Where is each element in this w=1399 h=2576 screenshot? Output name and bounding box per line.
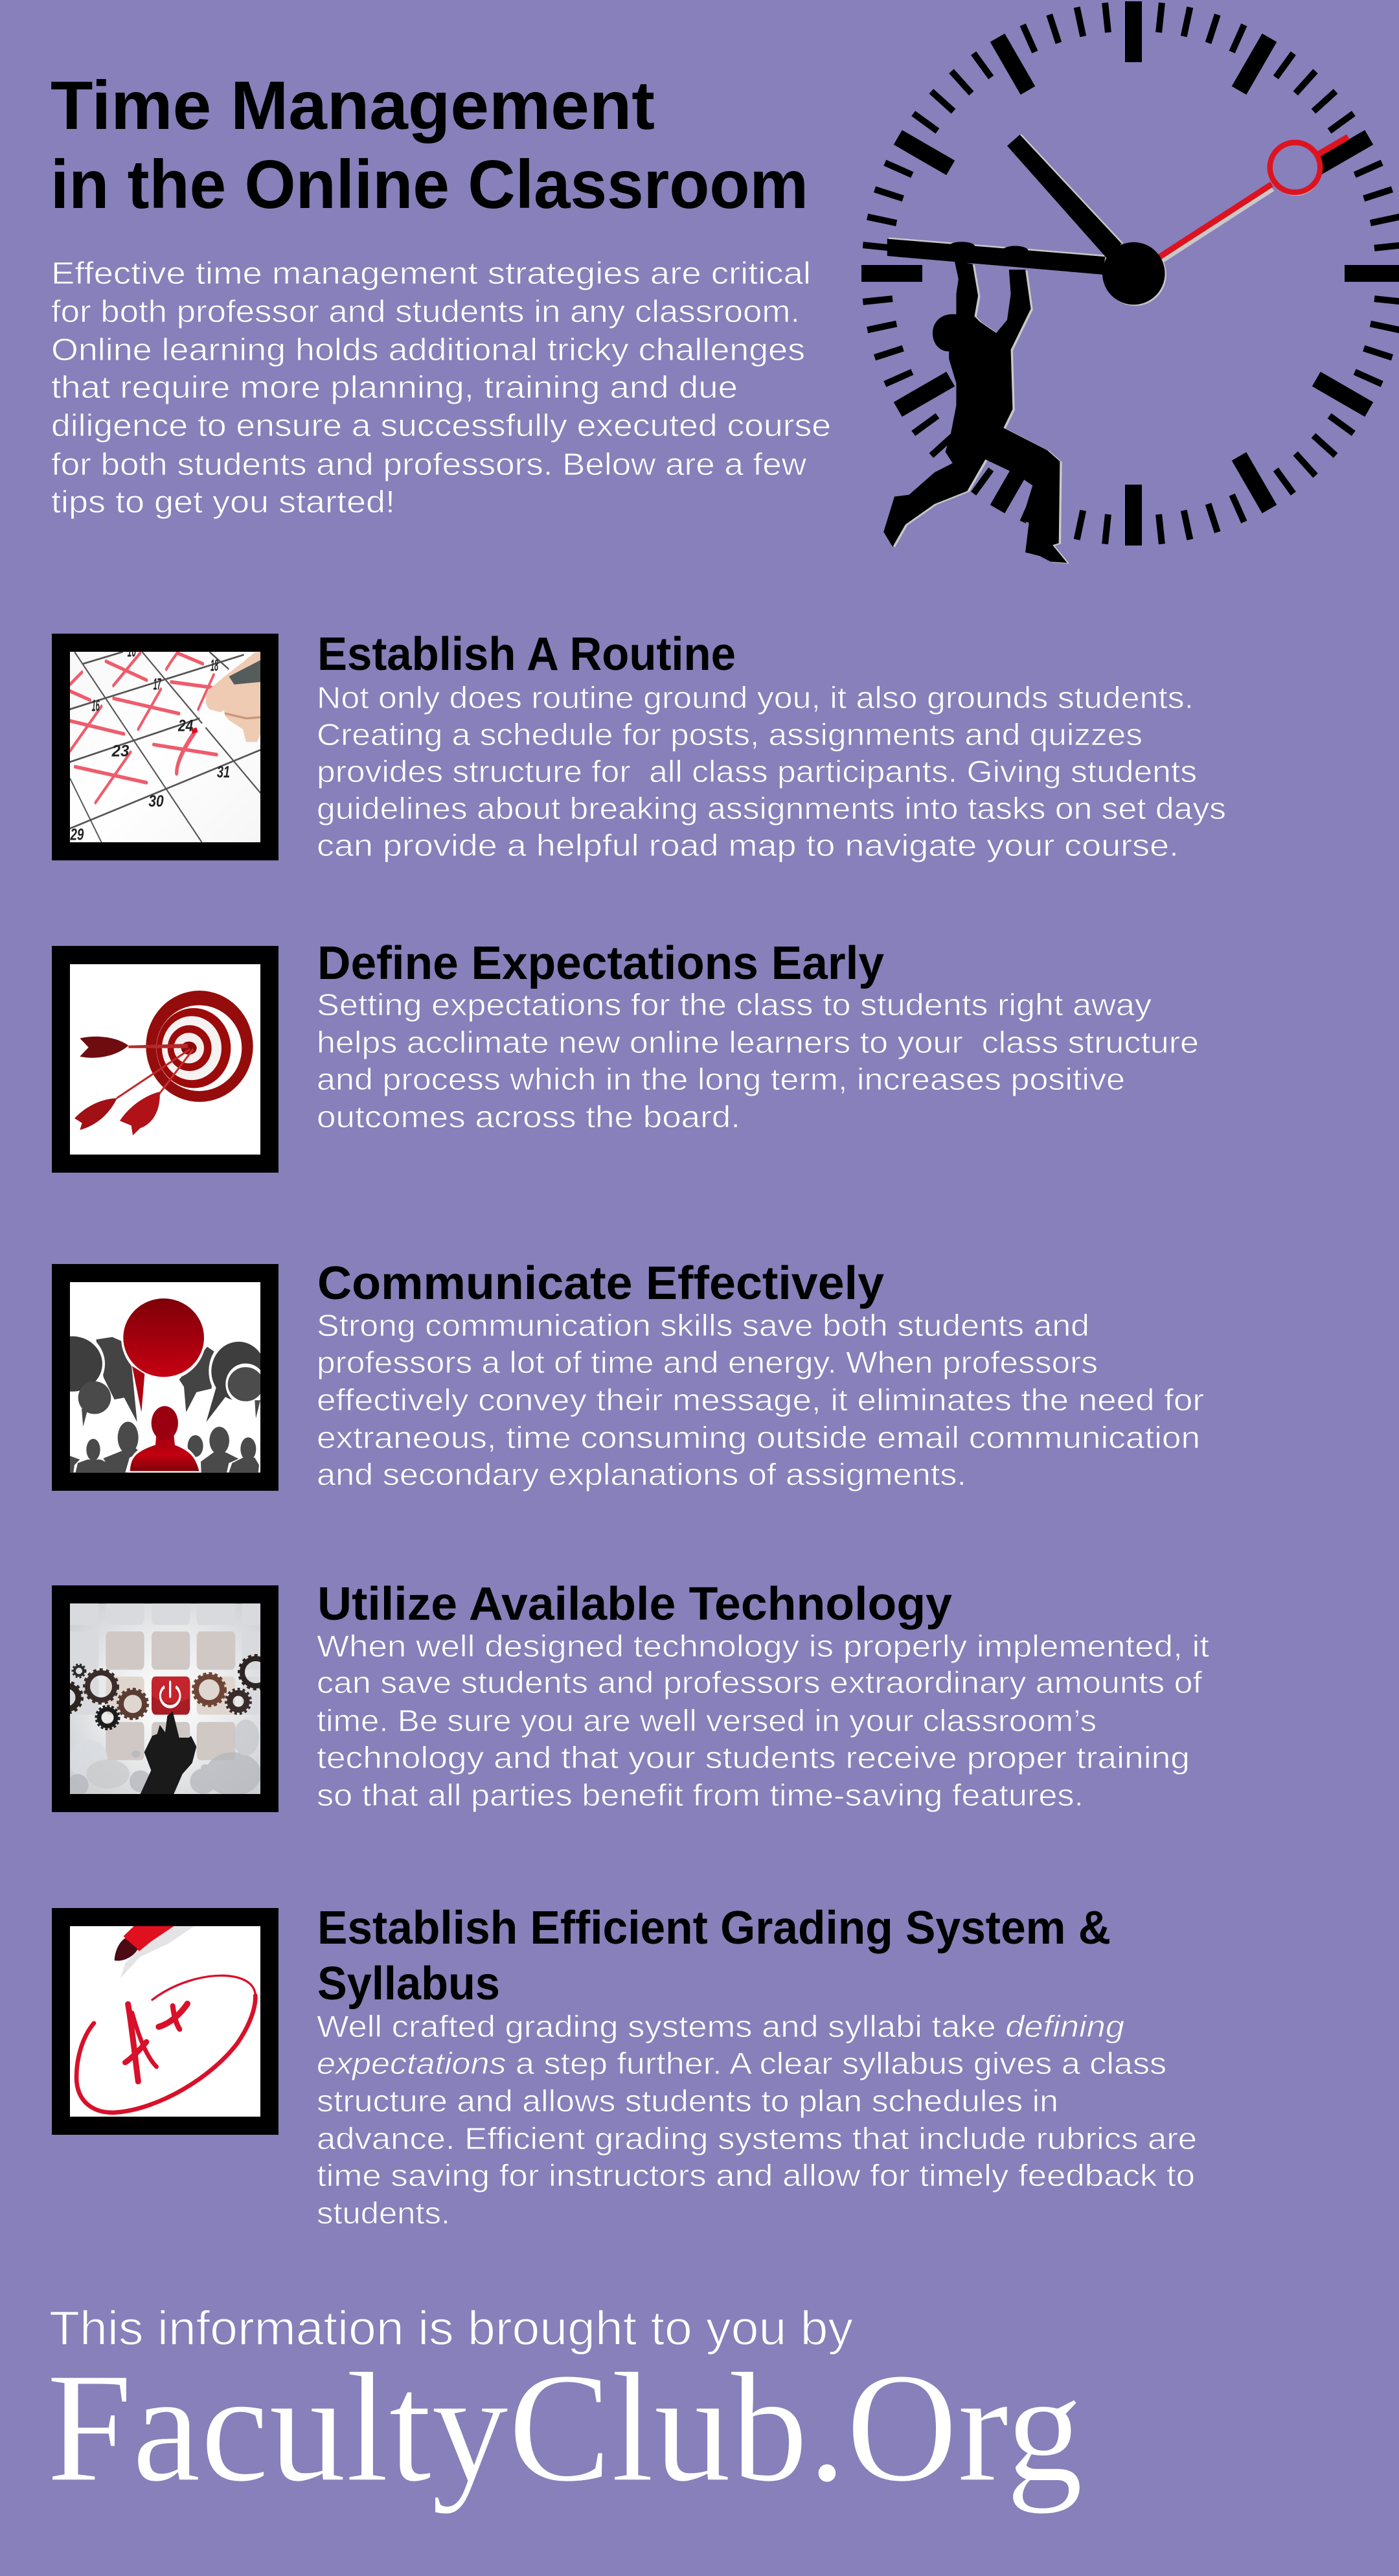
heading: Establish Efficient Grading System & bbox=[317, 1902, 1111, 1954]
icon: calendar with red crosses: 30 bbox=[148, 793, 164, 811]
body text: outcomes across the board. bbox=[317, 1099, 740, 1134]
panel: utilize available technology bbox=[51, 1578, 1209, 1812]
body text: time saving for instructors and allow for timely feedback to bbox=[317, 2158, 1195, 2192]
heading: Syllabus bbox=[317, 1958, 500, 2010]
body text: and secondary explanations of assigments. bbox=[317, 1457, 966, 1491]
heading: Communicate Effectively bbox=[317, 1258, 884, 1309]
icon: target with arrows bbox=[70, 964, 260, 1155]
icon: calendar with red crosses: 29 bbox=[70, 827, 84, 844]
icon: calendar with red crosses: 17 bbox=[154, 676, 162, 693]
body text: helps acclimate new online learners to your class structure bbox=[317, 1025, 1199, 1059]
panel: establish efficient grading system and syllabus bbox=[52, 1902, 1197, 2230]
body text: Well crafted grading systems and syllabi take defining bbox=[317, 2009, 1124, 2043]
body text: students. bbox=[317, 2196, 450, 2230]
body text bbox=[317, 1629, 1209, 1812]
intro paragraph bbox=[51, 257, 831, 520]
title: Time Management bbox=[51, 67, 655, 144]
minute hand bbox=[887, 239, 1106, 275]
body text: professors a lot of time and energy. When professors bbox=[317, 1345, 1098, 1379]
icon: red marker and A+ grade bbox=[70, 1926, 260, 2117]
icon: calendar with red crosses: 18 bbox=[210, 658, 218, 675]
footer brand name: FacultyClub.Org bbox=[47, 2341, 1083, 2514]
man silhouette bbox=[883, 242, 1067, 563]
body text: time. Be sure you are well versed in your classroom’s bbox=[317, 1703, 1097, 1738]
body text bbox=[317, 987, 1199, 1134]
icon: calendar with red crosses: 31 bbox=[217, 765, 230, 781]
intro paragraph: for both professor and students in any classroom. bbox=[51, 295, 800, 329]
body text: effectively convey their message, it eliminates the need for bbox=[317, 1383, 1204, 1417]
intro paragraph: Online learning holds additional tricky challenges bbox=[51, 333, 805, 367]
icon: calendar with red crosses: 16 bbox=[92, 698, 100, 715]
body text: When well designed technology is properly implemented, it bbox=[317, 1629, 1209, 1663]
body text bbox=[317, 1308, 1204, 1491]
body text: Strong communication skills save both students and bbox=[317, 1308, 1089, 1342]
footer credit bbox=[47, 2301, 1083, 2514]
intro paragraph: for both students and professors. Below are a few bbox=[51, 448, 806, 482]
body text: structure and allows students to plan schedules in bbox=[317, 2084, 1058, 2118]
clock hub bbox=[1102, 242, 1165, 305]
panel: define expectations early bbox=[52, 937, 1199, 1173]
body text bbox=[317, 680, 1226, 862]
body text: Setting expectations for the class to students right away bbox=[317, 987, 1152, 1022]
icon frame: target bbox=[52, 946, 279, 1173]
panel: establish a routine bbox=[52, 628, 1226, 862]
icon: calendar with red crosses: 24 bbox=[177, 718, 193, 735]
body text: guidelines about breaking assignments into tasks on set days bbox=[317, 791, 1226, 825]
clock hands and hanging man bbox=[883, 134, 1348, 564]
clock minute ticks bbox=[861, 1, 1399, 546]
title: in the Online Classroom bbox=[51, 146, 808, 223]
body text: so that all parties benefit from time-saving features. bbox=[317, 1778, 1084, 1812]
icon frame: technology bbox=[52, 1585, 279, 1812]
intro paragraph: diligence to ensure a successfully executed course bbox=[51, 409, 831, 443]
body text: provides structure for all class participants. Giving students bbox=[317, 754, 1197, 788]
body text: technology and that your students receive proper training bbox=[317, 1740, 1190, 1775]
second hand bbox=[1160, 137, 1348, 257]
title bbox=[51, 67, 808, 223]
intro paragraph: that require more planning, training and due bbox=[51, 371, 738, 405]
footer credit: This information is brought to you by bbox=[49, 2301, 853, 2355]
icon frame: speech bubbles bbox=[52, 1264, 279, 1491]
icon: calendar with red crosses bbox=[70, 643, 260, 844]
body text: Not only does routine ground you, it also grounds students. bbox=[317, 680, 1194, 715]
body text: can save students and professors extraordinary amounts of bbox=[317, 1665, 1203, 1699]
icon frame: calendar bbox=[52, 634, 279, 860]
heading: Utilize Available Technology bbox=[317, 1578, 952, 1630]
intro paragraph: Effective time management strategies are critical bbox=[51, 257, 811, 291]
body text: and process which in the long term, increases positive bbox=[317, 1062, 1125, 1096]
icon: calendar with red crosses: 10 bbox=[128, 643, 136, 660]
body text: expectations a step further. A clear syllabus gives a class bbox=[317, 2046, 1166, 2080]
body text: advance. Efficient grading systems that include rubrics are bbox=[317, 2121, 1197, 2156]
heading bbox=[317, 1902, 1111, 2010]
body text: Creating a schedule for posts, assignments and quizzes bbox=[317, 717, 1143, 752]
heading: Establish A Routine bbox=[317, 628, 736, 680]
icon: gears and power button bbox=[70, 1603, 260, 1794]
body text: can provide a helpful road map to navigate your course. bbox=[317, 828, 1179, 862]
icon: calendar with red crosses: 23 bbox=[111, 743, 130, 761]
intro paragraph: tips to get you started! bbox=[51, 485, 395, 520]
hour hand bbox=[1007, 135, 1122, 259]
body text bbox=[317, 2009, 1197, 2230]
icon: speech bubbles and people bbox=[70, 1282, 260, 1473]
heading: Define Expectations Early bbox=[317, 937, 884, 989]
clock illustration bbox=[861, 1, 1399, 564]
icon frame: grade bbox=[52, 1908, 279, 2135]
hands highlight bbox=[886, 134, 1321, 564]
body text: extraneous, time consuming outside email communication bbox=[317, 1420, 1200, 1455]
panel: communicate effectively bbox=[41, 1258, 1204, 1491]
